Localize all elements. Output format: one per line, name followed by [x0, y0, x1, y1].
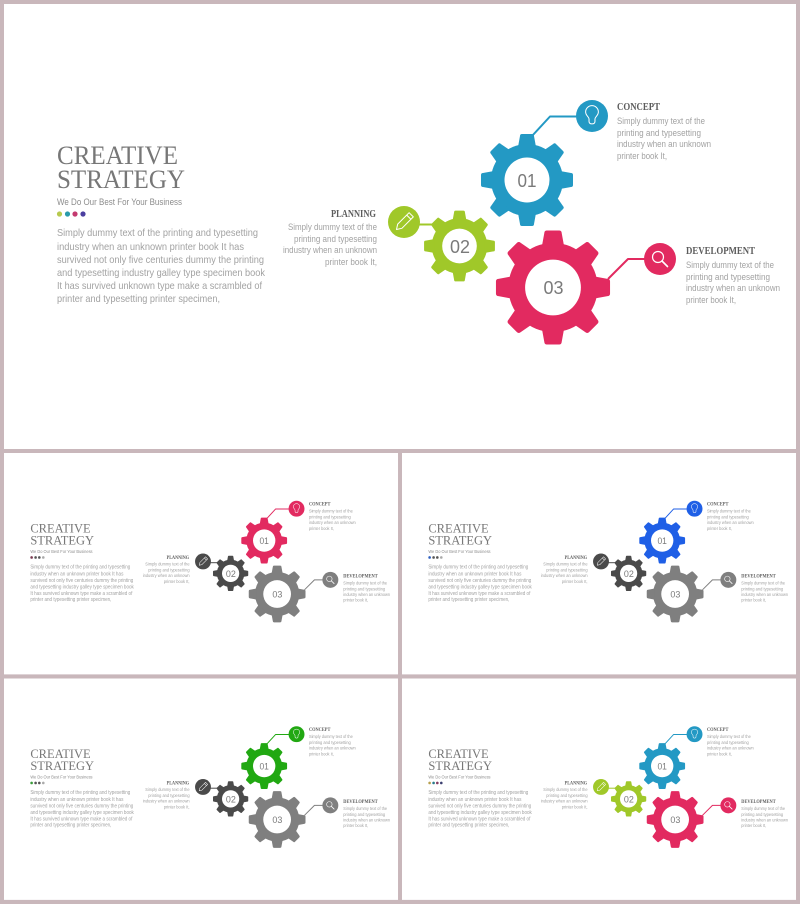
body text: It has survived unknown type make a scrambled of: [30, 591, 133, 597]
label: concept: [309, 502, 356, 531]
label: development: printing and typesetting: [741, 812, 784, 817]
label: planning: printer book It,: [562, 579, 588, 584]
body text: and typesetting industry galley type specimen book: [30, 584, 134, 590]
body text: It has survived unknown type make a scrambled of: [57, 280, 262, 292]
label: development: DEVELOPMENT: [343, 799, 378, 805]
label: planning: printer book It,: [562, 804, 588, 809]
label: development: printer book It,: [343, 598, 368, 603]
body text: It has survived unknown type make a scrambled of: [428, 591, 531, 597]
label: development: [343, 573, 391, 603]
label: planning: [541, 780, 588, 809]
label: development: printing and typesetting: [343, 586, 386, 591]
gear 01: [639, 726, 702, 789]
title: CREATIVE: [57, 141, 178, 170]
label: development: Simply dummy text of the: [741, 580, 786, 585]
label: planning: printer book It,: [325, 257, 377, 267]
label: planning: [143, 780, 190, 809]
gear 03: [647, 566, 736, 622]
body text: Simply dummy text of the printing and typesetting: [30, 790, 130, 796]
body text: and typesetting industry galley type specimen book: [428, 584, 532, 590]
gear 02: 02: [624, 794, 634, 804]
label: development: industry when an unknown: [686, 283, 780, 293]
label: concept: printer book It,: [309, 526, 334, 531]
label: planning: printing and typesetting: [148, 793, 190, 798]
body text: survived not only five centuries dummy the printing: [57, 254, 264, 266]
label: planning: printing and typesetting: [546, 567, 588, 572]
body text: and typesetting industry galley type specimen book: [30, 810, 134, 816]
gear 01 with concept icon: [481, 100, 608, 226]
panel: main slide: [4, 4, 796, 449]
gear 03: 03: [670, 589, 680, 599]
label: planning: printing and typesetting: [294, 234, 377, 244]
title: [30, 521, 94, 548]
label: concept: Simply dummy text of the: [707, 509, 751, 514]
gear 02: 02: [624, 569, 634, 579]
label: planning: industry when an unknown: [283, 245, 377, 255]
label: planning: PLANNING: [565, 555, 587, 561]
gear 01: 01: [259, 536, 269, 546]
gear 03: 03: [272, 815, 282, 825]
label: development: printer book It,: [741, 598, 766, 603]
gear 02: [195, 779, 248, 817]
label: development: printing and typesetting: [686, 272, 770, 282]
dots: [30, 782, 45, 784]
body text: printer and typesetting printer specimen,: [57, 293, 220, 305]
label: concept: printer book It,: [707, 526, 732, 531]
panel: full colour variant: [402, 678, 796, 900]
gear 01: 01: [657, 762, 667, 772]
gear 03: [647, 791, 736, 848]
label: development: printing and typesetting: [343, 812, 386, 817]
label: development: printer book It,: [686, 295, 736, 305]
label: concept: printing and typesetting: [309, 740, 351, 745]
label: concept: [707, 502, 754, 531]
label: concept: Simply dummy text of the: [309, 734, 353, 739]
label: development: DEVELOPMENT: [343, 573, 378, 579]
body text: industry when an unknown printer book It has: [30, 571, 124, 577]
body text: survived not only five centuries dummy the printing: [30, 803, 133, 809]
label: development: printer book It,: [343, 823, 368, 828]
body text: industry when an unknown printer book It has: [428, 797, 522, 803]
label: concept: industry when an unknown: [309, 520, 356, 525]
label: planning: industry when an unknown: [143, 573, 190, 578]
label: development: Simply dummy text of the: [686, 260, 774, 270]
panel: blue variant: [402, 453, 796, 674]
label: development: [686, 246, 780, 305]
label: planning: industry when an unknown: [143, 798, 190, 803]
label: concept: printing and typesetting: [309, 515, 351, 520]
label: concept: CONCEPT: [707, 727, 729, 733]
label: development: industry when an unknown: [343, 592, 391, 597]
body text: survived not only five centuries dummy the printing: [30, 578, 133, 584]
body text: It has survived unknown type make a scrambled of: [30, 816, 133, 822]
label: development: industry when an unknown: [741, 592, 789, 597]
label: planning: Simply dummy text of the: [145, 561, 190, 566]
body text: [30, 564, 134, 603]
label: concept: Simply dummy text of the: [617, 116, 705, 126]
label: concept: printing and typesetting: [617, 128, 701, 138]
gear 02 with planning icon: 02: [450, 237, 470, 257]
label: concept: CONCEPT: [309, 727, 331, 733]
title: CREATIVE: [30, 521, 91, 536]
gear 02: 02: [226, 794, 236, 804]
label: planning: [143, 555, 190, 584]
label: development: industry when an unknown: [741, 817, 789, 822]
label: concept: Simply dummy text of the: [309, 509, 353, 514]
title: STRATEGY: [57, 165, 185, 194]
label: development: Simply dummy text of the: [343, 580, 388, 585]
title: CREATIVE: [30, 746, 91, 761]
gear 03 with development icon: [496, 230, 676, 345]
body text: and typesetting industry galley type specimen book: [57, 267, 266, 279]
title: STRATEGY: [428, 758, 492, 773]
label: development: printing and typesetting: [741, 586, 784, 591]
dots: [428, 556, 443, 559]
label: concept: industry when an unknown: [309, 746, 356, 751]
body text: [30, 790, 134, 829]
gear 01: [241, 501, 304, 563]
label: planning: [541, 555, 588, 584]
dots: [30, 556, 45, 559]
body text: Simply dummy text of the printing and typesetting: [30, 564, 130, 570]
colour dots: [57, 211, 86, 217]
panel: pink variant: [4, 453, 398, 674]
label: concept: printer book It,: [617, 151, 667, 161]
label: development: industry when an unknown: [343, 817, 391, 822]
body text: printer and typesetting printer specimen,: [428, 823, 509, 829]
title: [57, 141, 185, 194]
body text: survived not only five centuries dummy the printing: [428, 578, 531, 584]
gear 02: [593, 779, 646, 817]
label: concept: printing and typesetting: [707, 515, 749, 520]
gear 02: [195, 553, 248, 591]
label: concept: CONCEPT: [707, 502, 729, 508]
gear 01: 01: [259, 762, 269, 772]
title: [428, 746, 492, 773]
subtitle: We Do Our Best For Your Business: [30, 774, 93, 780]
subtitle: We Do Our Best For Your Business: [57, 197, 182, 208]
label: planning: printing and typesetting: [546, 793, 588, 798]
label: concept: CONCEPT: [617, 102, 660, 113]
label: development: [741, 573, 789, 603]
label: planning: [283, 209, 377, 267]
subtitle: We Do Our Best For Your Business: [30, 549, 93, 555]
gear 03: [249, 791, 338, 848]
panel: green variant: [4, 678, 398, 900]
label: planning: PLANNING: [167, 780, 189, 786]
label: development: printer book It,: [741, 823, 766, 828]
label: concept: industry when an unknown: [707, 746, 754, 751]
subtitle: We Do Our Best For Your Business: [428, 549, 491, 555]
body text: It has survived unknown type make a scrambled of: [428, 816, 531, 822]
label: planning: PLANNING: [331, 209, 376, 220]
label: planning: Simply dummy text of the: [288, 222, 377, 232]
label: planning: industry when an unknown: [541, 573, 588, 578]
title: [30, 746, 94, 773]
gear 03: 03: [272, 589, 282, 599]
body text: industry when an unknown printer book It has: [428, 571, 522, 577]
body text: printer and typesetting printer specimen,: [30, 823, 111, 829]
gear 02: 02: [226, 569, 236, 579]
gear 01: [241, 726, 304, 789]
body text: industry when an unknown printer book It has: [30, 797, 124, 803]
title: STRATEGY: [428, 533, 492, 548]
label: planning: PLANNING: [167, 555, 189, 561]
title: CREATIVE: [428, 746, 489, 761]
label: planning: industry when an unknown: [541, 798, 588, 803]
label: planning: Simply dummy text of the: [145, 787, 190, 792]
dots: [428, 782, 443, 784]
body text: [428, 790, 532, 829]
title: [428, 521, 492, 548]
label: planning: printer book It,: [164, 804, 190, 809]
title: CREATIVE: [428, 521, 489, 536]
label: concept: Simply dummy text of the: [707, 734, 751, 739]
label: development: DEVELOPMENT: [741, 799, 776, 805]
label: planning: Simply dummy text of the: [543, 561, 588, 566]
body text: and typesetting industry galley type specimen book: [428, 810, 532, 816]
body text: [57, 227, 266, 305]
title: STRATEGY: [30, 533, 94, 548]
title: STRATEGY: [30, 758, 94, 773]
label: concept: printer book It,: [707, 752, 732, 757]
label: concept: printer book It,: [309, 752, 334, 757]
label: development: [741, 799, 789, 828]
body text: printer and typesetting printer specimen,: [30, 597, 111, 603]
gear 01: 01: [657, 536, 667, 546]
label: planning: PLANNING: [565, 780, 587, 786]
label: planning: printing and typesetting: [148, 567, 190, 572]
label: planning: printer book It,: [164, 579, 190, 584]
label: concept: [707, 727, 754, 757]
label: concept: industry when an unknown: [707, 520, 754, 525]
label: concept: industry when an unknown: [617, 139, 711, 149]
gear 02: [593, 553, 646, 591]
body text: Simply dummy text of the printing and typesetting: [428, 564, 528, 570]
label: planning: Simply dummy text of the: [543, 787, 588, 792]
gear 03 with development icon: 03: [544, 278, 564, 298]
label: development: DEVELOPMENT: [686, 246, 755, 257]
body text: [428, 564, 532, 603]
label: development: Simply dummy text of the: [741, 806, 786, 811]
label: concept: printing and typesetting: [707, 740, 749, 745]
label: concept: CONCEPT: [309, 502, 331, 508]
gear 03: [249, 566, 338, 622]
label: concept: [617, 102, 711, 161]
body text: Simply dummy text of the printing and typesetting: [428, 790, 528, 796]
label: concept: [309, 727, 356, 757]
label: development: Simply dummy text of the: [343, 806, 388, 811]
label: development: [343, 799, 391, 828]
gear 02 with planning icon: [388, 206, 495, 281]
gear 01: [639, 501, 702, 563]
subtitle: We Do Our Best For Your Business: [428, 774, 491, 780]
gear 01 with concept icon: 01: [518, 171, 536, 191]
body text: industry when an unknown printer book It has: [57, 241, 244, 253]
body text: printer and typesetting printer specimen,: [428, 597, 509, 603]
body text: survived not only five centuries dummy the printing: [428, 803, 531, 809]
body text: Simply dummy text of the printing and typesetting: [57, 227, 258, 239]
gear 03: 03: [670, 815, 680, 825]
label: development: DEVELOPMENT: [741, 573, 776, 579]
